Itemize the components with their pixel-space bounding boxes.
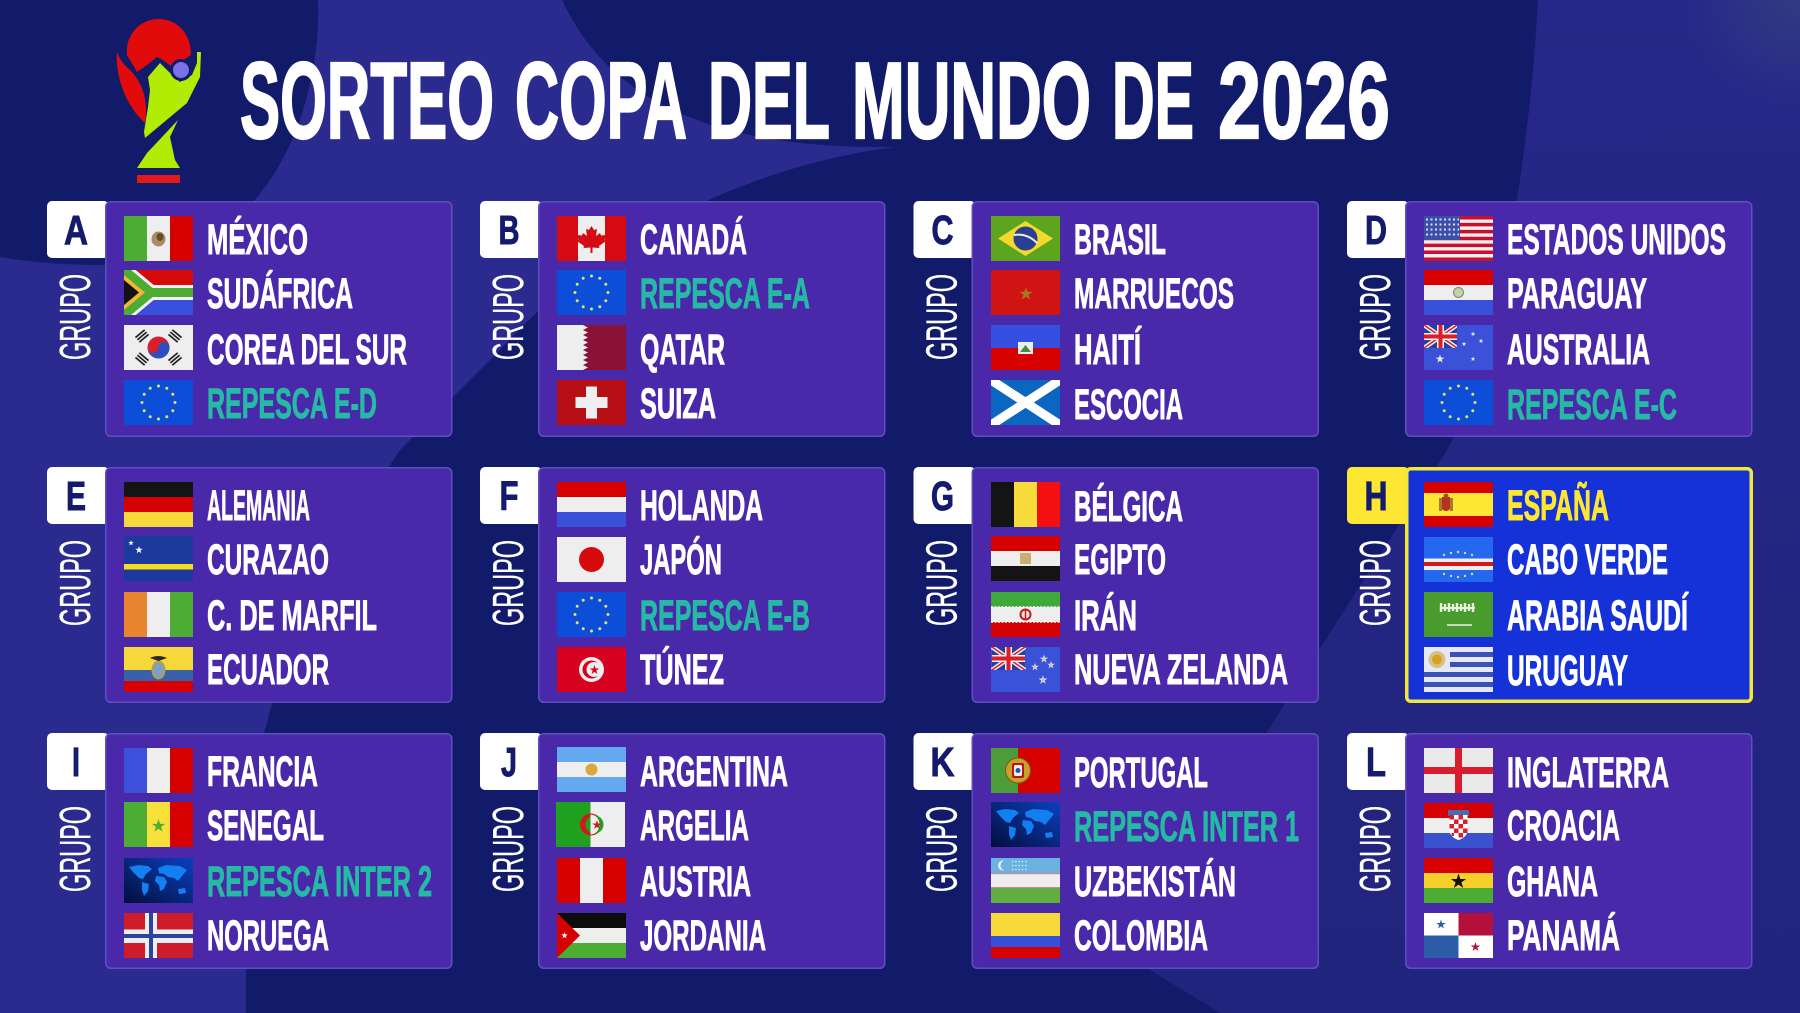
team Uzbekistán: UZBEKISTÁN <box>1074 858 1236 906</box>
label grupo: GRUPO <box>51 806 100 892</box>
label grupo: GRUPO <box>1351 806 1400 892</box>
label grupo: GRUPO <box>918 540 966 626</box>
panel: grupo L <box>1347 733 1752 968</box>
team Austria: AUSTRIA <box>640 858 751 906</box>
flag Inglaterra <box>1424 748 1493 793</box>
team Brasil: BRASIL <box>1074 216 1166 264</box>
label grupo: GRUPO <box>484 274 533 360</box>
flag Argentina <box>557 747 626 792</box>
team España: ESPAÑA <box>1507 482 1609 530</box>
team Sudáfrica: SUDÁFRICA <box>207 270 353 318</box>
title: COPA <box>515 40 687 162</box>
title: MUNDO <box>852 40 1091 162</box>
flag Noruega <box>124 913 193 958</box>
tab G <box>914 467 976 524</box>
flag Jordania <box>557 913 626 958</box>
label grupo: GRUPO <box>918 274 966 360</box>
team Repesca E-A: REPESCA E-A <box>640 270 810 318</box>
panel box <box>106 202 452 436</box>
panel box <box>539 468 885 702</box>
team Repesca E-D: REPESCA E-D <box>207 380 377 428</box>
team Haití: HAITÍ <box>1074 326 1142 374</box>
flag Egipto <box>991 536 1060 581</box>
team Corea del Sur: COREA DEL SUR <box>207 326 407 374</box>
tab A: A <box>64 207 88 253</box>
flag México <box>124 216 193 261</box>
tab K: K <box>930 739 955 785</box>
tab E <box>47 467 109 524</box>
team Repesca Inter 1: REPESCA INTER 1 <box>1074 803 1299 851</box>
team Jordania: JORDANIA <box>640 912 766 960</box>
flag Repesca E-B <box>557 592 626 637</box>
flag Arabia Saudí <box>1424 592 1493 637</box>
team Egipto: EGIPTO <box>1074 536 1166 584</box>
flag Uzbekistán <box>991 858 1060 903</box>
flag Haití <box>991 325 1060 370</box>
tab D <box>1347 201 1409 258</box>
label grupo: GRUPO <box>484 806 533 892</box>
panel: grupo E: ALEMANIA <box>207 482 310 530</box>
panel: grupo F <box>480 467 885 702</box>
tab C: C <box>932 207 954 253</box>
panel box <box>106 468 452 702</box>
team Uruguay: URUGUAY <box>1507 647 1628 695</box>
panel: grupo B <box>480 201 885 436</box>
team Túnez: TÚNEZ <box>640 645 724 694</box>
flag Francia <box>124 748 193 793</box>
team Paraguay: PARAGUAY <box>1507 270 1647 318</box>
team Colombia: COLOMBIA <box>1074 912 1208 960</box>
flag Panamá <box>1424 913 1493 958</box>
title: SORTEO <box>240 40 494 162</box>
tab L <box>1347 733 1409 790</box>
panel box <box>972 734 1318 968</box>
team Qatar: QATAR <box>640 326 725 374</box>
flag Japón <box>557 537 626 582</box>
label grupo: GRUPO <box>51 540 100 626</box>
team Repesca E-B: REPESCA E-B <box>640 592 810 640</box>
tab C <box>914 201 976 258</box>
team Panamá: PANAMÁ <box>1507 912 1620 960</box>
tab G: G <box>931 473 954 519</box>
team Holanda: HOLANDA <box>640 482 763 530</box>
flag Nueva Zelanda <box>991 647 1060 692</box>
flag Croacia <box>1424 803 1493 848</box>
team Repesca E-C: REPESCA E-C <box>1507 381 1677 429</box>
team Japón: JAPÓN <box>640 535 722 584</box>
panel: grupo I <box>47 733 452 968</box>
flag Repesca E-D <box>124 380 193 425</box>
tab L: L <box>1366 739 1386 785</box>
flag España <box>1424 482 1493 527</box>
tab I: I <box>72 739 80 785</box>
title: DE <box>1112 40 1194 162</box>
team Nueva Zelanda: NUEVA ZELANDA <box>1074 646 1288 694</box>
team C. de Marfil: C. DE MARFIL <box>207 592 377 640</box>
flag Senegal <box>124 802 193 847</box>
flag Bélgica <box>991 482 1060 527</box>
flag Suiza <box>557 380 626 425</box>
tab K <box>914 733 976 790</box>
tab I <box>47 733 109 790</box>
team Cabo Verde: CABO VERDE <box>1507 536 1668 584</box>
flag Ecuador <box>124 647 193 692</box>
label grupo: GRUPO <box>1351 274 1400 360</box>
panel: grupo C <box>914 201 1318 436</box>
panel box <box>539 202 885 436</box>
flag C. de Marfil <box>124 592 193 637</box>
flag Portugal <box>991 748 1060 793</box>
panel: grupo E <box>47 467 452 702</box>
panel: grupo K <box>914 733 1318 968</box>
flag Austria <box>557 858 626 903</box>
flag Uruguay <box>1424 647 1493 692</box>
team Argentina: ARGENTINA <box>640 748 788 796</box>
tab J <box>480 733 542 790</box>
team Senegal: SENEGAL <box>207 802 324 850</box>
tab H <box>1347 467 1409 524</box>
flag Canadá <box>557 216 626 261</box>
panel box <box>1407 469 1751 701</box>
panel: grupo D <box>1347 201 1752 436</box>
team Francia: FRANCIA <box>207 748 318 796</box>
panel box <box>1406 202 1752 436</box>
flag Marruecos <box>991 270 1060 315</box>
team México: MÉXICO <box>207 216 308 264</box>
flag Repesca Inter 2 <box>124 858 193 903</box>
team Inglaterra: INGLATERRA <box>1507 749 1669 797</box>
flag Corea del Sur <box>124 325 193 370</box>
title: 2026 <box>1218 40 1390 162</box>
flag Cabo Verde <box>1424 537 1493 582</box>
team Noruega: NORUEGA <box>207 912 329 960</box>
icon: trophy <box>117 19 201 183</box>
flag Australia <box>1424 325 1493 370</box>
panel: grupo A <box>47 201 452 436</box>
panel box <box>106 734 452 968</box>
flag Irán <box>991 592 1060 637</box>
label grupo: GRUPO <box>1351 540 1400 626</box>
tab B <box>480 201 542 258</box>
tab E: E <box>66 473 86 519</box>
flag Curazao <box>124 536 193 581</box>
flag Repesca E-C <box>1424 380 1493 425</box>
flag Túnez <box>557 647 626 692</box>
tab D: D <box>1365 207 1387 253</box>
tab A <box>47 201 109 258</box>
flag Escocia <box>991 380 1060 425</box>
flag Repesca E-A <box>557 270 626 315</box>
flag Estados Unidos <box>1424 216 1493 261</box>
panel: grupo G <box>914 467 1318 702</box>
panel: grupo H highlighted <box>1347 467 1751 701</box>
team Marruecos: MARRUECOS <box>1074 270 1234 318</box>
flag Colombia <box>991 913 1060 958</box>
panel box <box>972 202 1318 436</box>
flag Argelia <box>556 802 625 847</box>
team Escocia: ESCOCIA <box>1074 381 1183 429</box>
team Australia: AUSTRALIA <box>1507 326 1650 374</box>
flag Repesca Inter 1 <box>991 802 1060 847</box>
panel: grupo J <box>480 733 885 968</box>
flag Ghana <box>1424 858 1493 903</box>
flag Paraguay <box>1424 270 1493 315</box>
team Argelia: ARGELIA <box>640 802 749 850</box>
team Ghana: GHANA <box>1507 858 1598 906</box>
tab H: H <box>1364 473 1388 519</box>
team Suiza: SUIZA <box>640 380 716 428</box>
panel box <box>972 468 1318 702</box>
team Ecuador: ECUADOR <box>207 646 329 694</box>
flag Holanda <box>557 482 626 527</box>
team Repesca Inter 2: REPESCA INTER 2 <box>207 858 432 906</box>
title: DEL <box>708 40 830 162</box>
team Canadá: CANADÁ <box>640 216 747 264</box>
tab F: F <box>500 473 518 519</box>
team Portugal: PORTUGAL <box>1074 749 1208 797</box>
label grupo: GRUPO <box>51 274 100 360</box>
tab B: B <box>498 207 520 253</box>
flag Alemania <box>124 482 193 527</box>
flag Brasil <box>991 216 1060 261</box>
title <box>240 40 1390 162</box>
label grupo: GRUPO <box>918 806 966 892</box>
panel box <box>539 734 885 968</box>
tab J: J <box>501 739 517 785</box>
team Croacia: CROACIA <box>1507 802 1620 850</box>
panel box <box>1406 734 1752 968</box>
flag Sudáfrica <box>124 270 193 315</box>
team Bélgica: BÉLGICA <box>1074 483 1183 531</box>
team Irán: IRÁN <box>1074 592 1137 640</box>
tab F <box>480 467 542 524</box>
label grupo: GRUPO <box>484 540 533 626</box>
flag Qatar <box>557 325 626 370</box>
team Curazao: CURAZAO <box>207 536 329 584</box>
